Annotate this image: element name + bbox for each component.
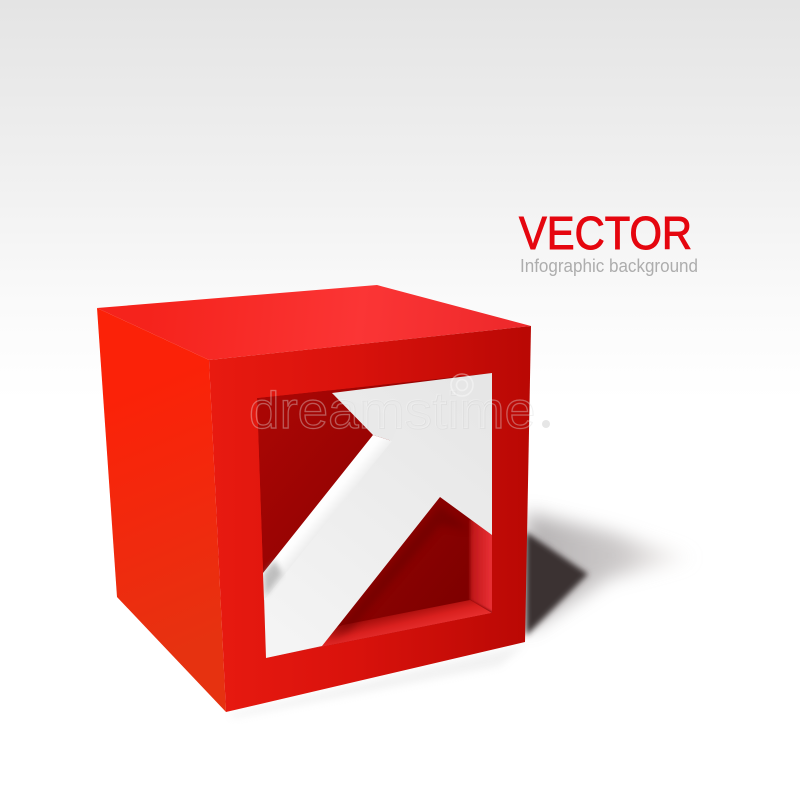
watermark dot bbox=[542, 420, 550, 428]
white arrow bbox=[263, 373, 492, 658]
recess floor bbox=[266, 600, 492, 658]
watermark logo bbox=[451, 374, 473, 396]
watermark: dreamstime bbox=[250, 383, 536, 441]
recess right wall bbox=[468, 519, 492, 613]
cube front face bbox=[209, 326, 531, 712]
arrow head notch bbox=[332, 393, 400, 441]
window recess bbox=[257, 373, 494, 658]
cube cast shadow bbox=[230, 512, 695, 718]
title: VECTOR: VECTOR bbox=[519, 207, 692, 259]
subtitle: Infographic background bbox=[520, 256, 698, 276]
arrow drop shadow bbox=[330, 505, 470, 640]
arrow highlight band bbox=[263, 435, 392, 600]
cube left face bbox=[97, 308, 226, 712]
cube top face bbox=[97, 285, 531, 360]
recess back wall bbox=[257, 373, 492, 658]
band end shading bbox=[263, 560, 282, 596]
watermark: dreamstime bbox=[249, 382, 535, 440]
red cube bbox=[97, 285, 531, 712]
arrow body bbox=[264, 373, 492, 658]
